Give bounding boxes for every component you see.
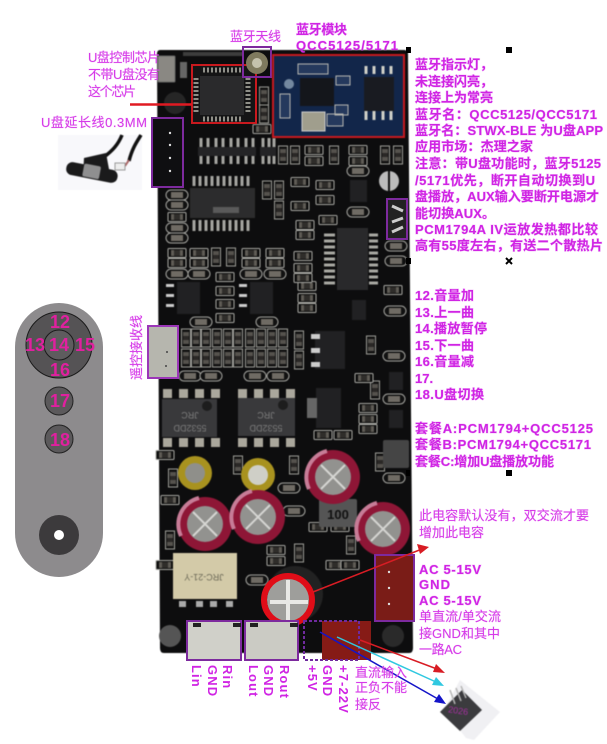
label: remote receiver: 遥控接收线 [129,315,144,380]
text block: Bluetooth notes: 能切换AUX。 [415,206,495,221]
electrolytic capacitors [178,450,410,622]
remote key numbers: 18 [50,430,70,450]
label: Bluetooth module: 蓝牙模块 [296,22,347,37]
operational amplifier chips: JRC [257,410,275,420]
remote key numbers: 15 [75,335,95,355]
label: audio pins: Rout [277,665,292,699]
DC power connector [304,621,371,660]
panel: circuit board [156,50,413,653]
label: audio pins: Lout [246,665,261,698]
remote key numbers: 17 [50,391,70,411]
label: Bluetooth module [296,22,398,53]
label: DC input note [355,665,407,712]
antenna connector [243,47,271,77]
text block: key functions [415,288,487,402]
text block: Bluetooth notes: 高有55度左右，有送二个散热片 [415,238,603,253]
operational amplifier chips: JRC [181,410,199,420]
text block: kit options: 套餐A:PCM1794+QCC5125 [415,421,593,436]
text block: Bluetooth notes: 注意：带U盘功能时，蓝牙5125 [415,156,601,171]
label: audio pins: GND [205,665,220,697]
text block: key functions: 14.播放暂停 [415,321,487,336]
text block: key functions: 13.上一曲 [415,305,474,320]
icon: rectifier component: 2026 [448,704,469,717]
label: Bluetooth module: QCC5125/5171 [296,38,398,53]
text block: Bluetooth notes [415,57,603,253]
arrow: cyan ground wire [337,637,444,686]
arrow: red positive wire [360,640,445,673]
text block: key functions: 18.U盘切换 [415,387,484,402]
label: power pins [305,665,351,714]
image: USB extension cable [58,135,142,190]
selection handles [406,47,512,476]
label: AC power: GND [419,577,450,592]
small SMD parts [156,87,407,585]
arrow: blue wire [320,632,446,704]
remote jack [39,515,79,555]
icon: rectifier component [440,680,500,740]
text block: Bluetooth notes: PCM1794A IV运放发热都比较 [415,222,598,237]
text block: Bluetooth notes: 蓝牙指示灯， [415,57,493,72]
label: AC wiring note: 单直流/单交流 [419,609,501,624]
label: capacitor note: 此电容默认没有，双交流才要 [419,508,589,523]
text block: Bluetooth notes: 蓝牙名：QCC5125/QCC5171 [415,107,597,122]
text block: kit options: 套餐C:增加U盘播放功能 [415,454,554,469]
text block: Bluetooth notes: 应用市场：杰理之家 [415,139,533,154]
label: AC power: AC 5-15V [419,593,481,608]
label: capacitor note: 增加此电容 [419,525,484,540]
text block: key functions: 15.下一曲 [415,338,474,353]
label: audio pins: GND [261,665,276,697]
text block: Bluetooth notes: 未连接闪亮， [415,74,493,89]
circular key pad [26,312,92,453]
label: DC input note: 接反 [355,697,381,712]
highlighted capacitor [264,576,312,624]
label: AC wiring note: 接GND和其中 [419,626,500,641]
U disk control chip [192,65,256,123]
remote key numbers: 12 [50,312,70,332]
label: antenna: 蓝牙天线 [230,29,281,44]
text block: key functions: 17. [415,371,433,386]
text block: kit options: 套餐B:PCM1794+QCC5171 [415,437,591,452]
label: audio pins: Rin [220,665,235,689]
label: AC power: AC 5-15V [419,562,481,577]
USB header [152,118,183,187]
text block: key functions: 12.音量加 [415,288,474,303]
remote key numbers: 14 [49,335,69,355]
label: U disk chip note: 这个芯片 [88,84,136,99]
arrow: U disk chip pointer [130,103,192,106]
label: DC input note: 直流输入 [355,665,407,680]
label: AC wiring note: 一路AC [419,642,462,657]
inductors: 100 [327,507,349,522]
label: USB extension cable: U盘延长线0.3MM [41,115,147,130]
label: U disk chip note: U盘控制芯片 [88,50,160,65]
relay [173,553,237,607]
text block: Bluetooth notes: 连接上为常亮 [415,90,493,105]
relay: JRC-21-Y [184,572,224,582]
operational amplifier chips: 5532DD [173,423,207,433]
label: power pins: +5V [305,665,320,692]
inductors [319,440,409,527]
text block: key functions: 16.音量减 [415,354,474,369]
label: DC input note: 正负不能 [355,680,407,695]
jumper header [387,199,407,239]
resistor arrays [182,329,380,399]
remote key numbers: 13 [25,335,45,355]
operational amplifier chips: 5532DD [249,423,283,433]
label: AC power [419,562,481,608]
remote key numbers: 16 [50,360,70,380]
label: power pins: GND [320,665,335,697]
label: audio pins: Lin [189,665,204,688]
operational amplifier chips [162,389,295,447]
label: audio pins [189,665,292,699]
label: U disk chip note [88,50,160,99]
transistors [177,180,403,428]
label: power pins: +7-22V [336,665,351,714]
text block: Bluetooth notes: /5171优先，断开自动切换到U [415,173,595,188]
label: capacitor note [419,508,589,540]
remote key numbers [25,312,95,450]
label: AC wiring note [419,609,501,657]
PCM chips [190,176,378,290]
text block: kit options [415,421,593,469]
Bluetooth module [273,55,404,137]
remote receiver connector [148,326,178,378]
right AC connector [375,555,414,621]
text block: Bluetooth notes: 盘播放，AUX输入要断开电源才 [415,189,599,204]
logic chips row [198,138,276,164]
label: U disk chip note: 不带U盘没有 [88,67,160,82]
audio connectors [187,621,298,660]
arrow: capacitor note [313,544,429,592]
text block: Bluetooth notes: 蓝牙名：STWX-BLE 为U盘APP [415,123,603,138]
panel: remote control [15,303,103,577]
